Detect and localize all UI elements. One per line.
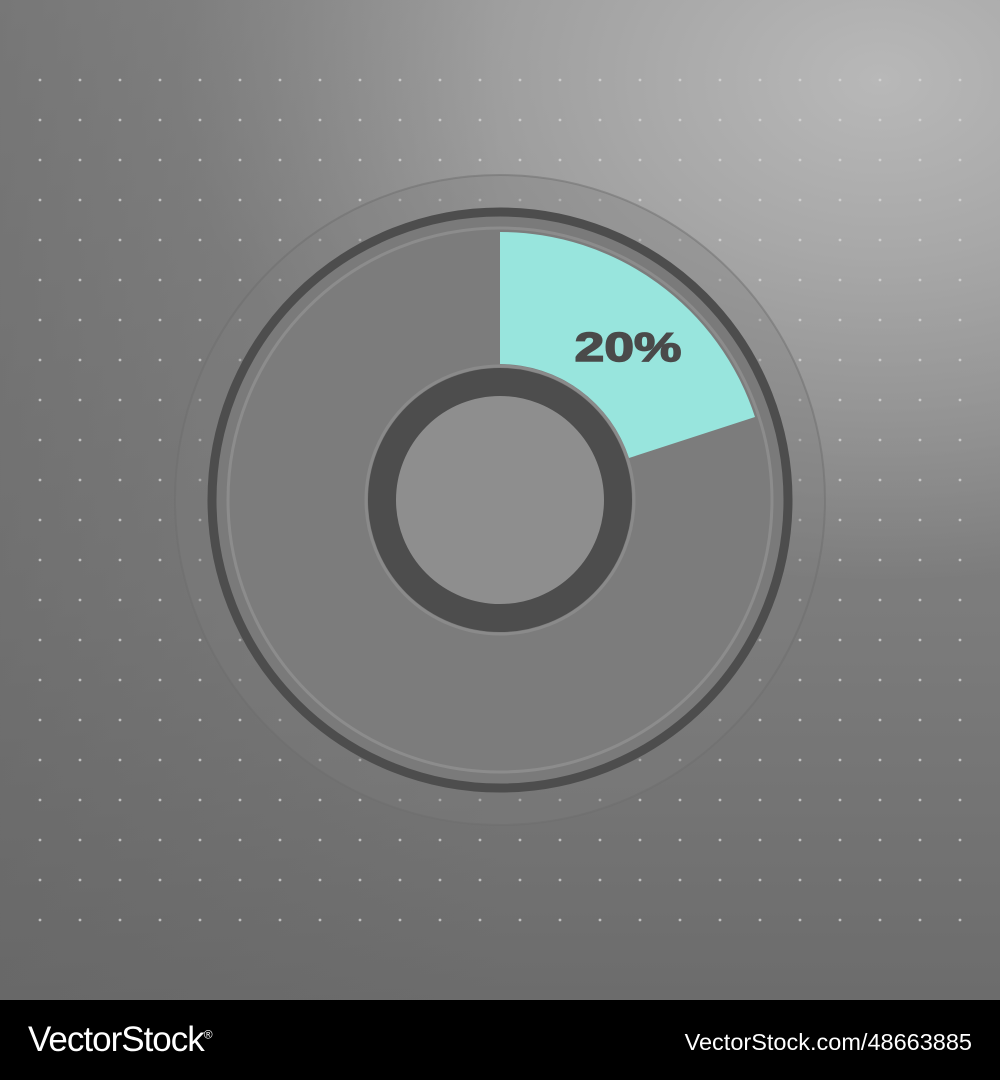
label: 20% — [575, 325, 681, 370]
footer bar: VectorStock® — [28, 1020, 212, 1059]
pie chart — [175, 175, 825, 825]
footer bar — [0, 1000, 1000, 1080]
segment: 20% — [500, 232, 755, 458]
inner ring — [382, 382, 618, 618]
footer bar: VectorStock.com/48663885 — [685, 1029, 972, 1055]
